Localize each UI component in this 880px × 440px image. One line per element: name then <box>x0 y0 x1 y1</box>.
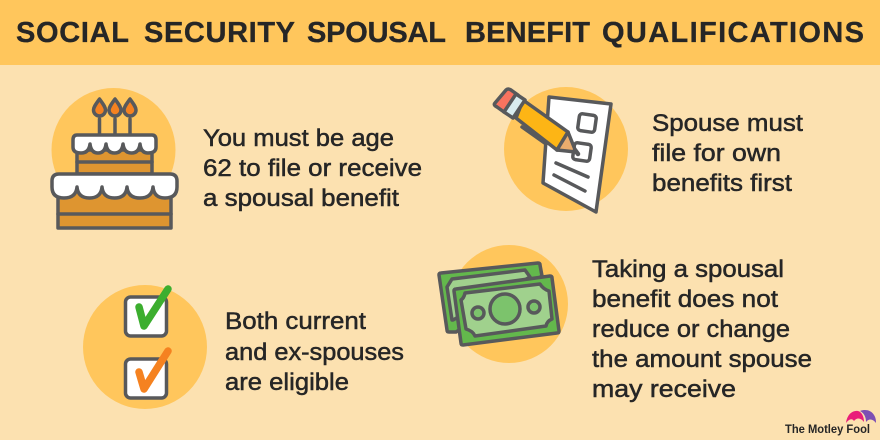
text: eligibility <box>225 308 404 396</box>
text: age requirement: 62 to file or receive <box>203 155 422 182</box>
logo: The Motley Fool <box>785 410 876 436</box>
text: no reduction note <box>592 256 812 403</box>
title banner: BENEFIT <box>465 17 590 49</box>
icon: pencil and form <box>494 87 628 212</box>
text: eligibility: and ex-spouses <box>225 339 404 366</box>
text: spouse must file: Spouse must <box>652 110 803 137</box>
text: eligibility: Both current <box>225 308 366 335</box>
logo: The Motley Fool: The Motley Fool <box>785 422 870 436</box>
text: no reduction note: Taking a spousal <box>592 256 784 283</box>
text: no reduction note: reduce or change <box>592 316 790 343</box>
title banner: SPOUSAL <box>307 17 446 49</box>
title banner <box>0 0 880 65</box>
icon: money <box>439 245 568 363</box>
text: no reduction note: benefit does not <box>592 286 778 313</box>
text: spouse must file: file for own <box>652 140 781 167</box>
text: no reduction note: the amount spouse <box>592 346 812 373</box>
title banner: SECURITY <box>144 17 295 49</box>
icon: birthday cake <box>52 88 177 228</box>
text: age requirement: a spousal benefit <box>203 185 399 212</box>
icon: check boxes <box>83 285 207 409</box>
text: age requirement <box>203 125 422 212</box>
title banner: SOCIAL <box>16 17 129 49</box>
text: age requirement: You must be age <box>203 125 394 152</box>
text: no reduction note: may receive <box>592 376 736 403</box>
title banner: QUALIFICATIONS <box>602 17 864 49</box>
text: spouse must file <box>652 110 803 197</box>
text: spouse must file: benefits first <box>652 170 792 197</box>
text: eligibility: are eligible <box>225 369 349 396</box>
